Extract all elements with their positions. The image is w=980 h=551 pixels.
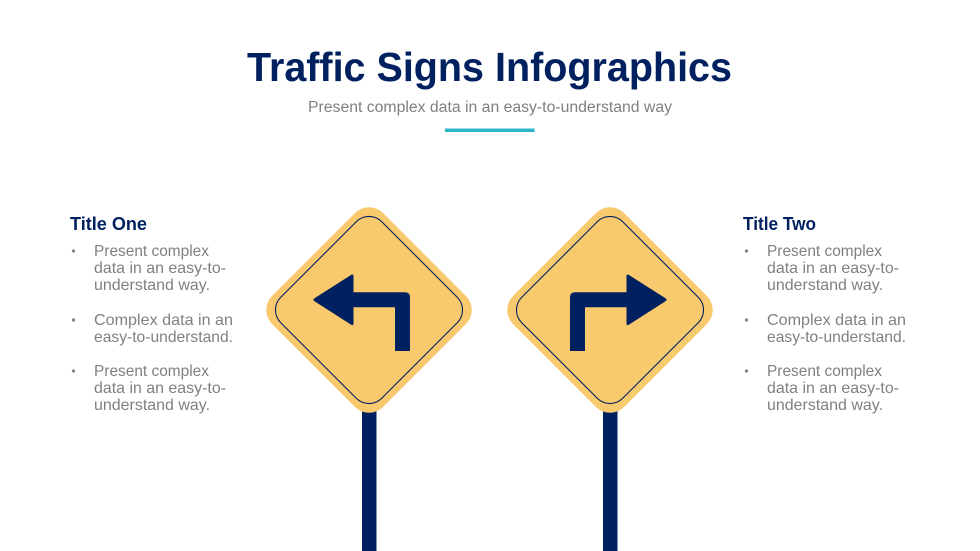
bullet list: title one [72, 243, 233, 414]
right turn sign [499, 199, 721, 551]
heading: title one: Title One [70, 213, 147, 234]
bullet list: title two: Complex data in an [767, 312, 906, 329]
sign pole [362, 408, 376, 551]
title: Traffic Signs Infographics [247, 44, 732, 90]
bullet list: title one: data in an easy-to- [94, 380, 226, 397]
panel: title one text [70, 213, 233, 414]
bullet list: title two: Present complex [767, 363, 882, 380]
bullet list: title one: Complex data in an [94, 312, 233, 329]
bullet list: title two: Present complex [767, 243, 882, 260]
bullet list: title two: understand way. [767, 397, 883, 414]
subtitle: Present complex data in an easy-to-understand way [308, 99, 672, 116]
heading: title two: Title Two [743, 213, 816, 234]
icon: right turn arrow [570, 274, 667, 351]
panel: title two text [743, 213, 906, 414]
bullet list: title two [745, 243, 906, 414]
bullet list: title one: easy-to-understand. [94, 329, 233, 346]
bullet list: title two: data in an easy-to- [767, 260, 899, 277]
bullet list: title one: data in an easy-to- [94, 260, 226, 277]
diamond sign board [258, 199, 480, 421]
bullet list: title one: understand way. [94, 277, 210, 294]
left turn sign [258, 199, 480, 551]
accent bar [445, 128, 534, 132]
icon: left turn arrow [313, 274, 410, 351]
diamond inner border [509, 209, 711, 411]
diamond sign board [499, 199, 721, 421]
bullet list: title one: understand way. [94, 397, 210, 414]
bullet list: title two: data in an easy-to- [767, 380, 899, 397]
sign pole [603, 408, 618, 551]
bullet list: title two: understand way. [767, 277, 883, 294]
bullet list: title one: Present complex [94, 243, 209, 260]
header [247, 44, 732, 132]
bullet list: title two: easy-to-understand. [767, 329, 906, 346]
diamond inner border [268, 209, 470, 411]
bullet list: title one: Present complex [94, 363, 209, 380]
